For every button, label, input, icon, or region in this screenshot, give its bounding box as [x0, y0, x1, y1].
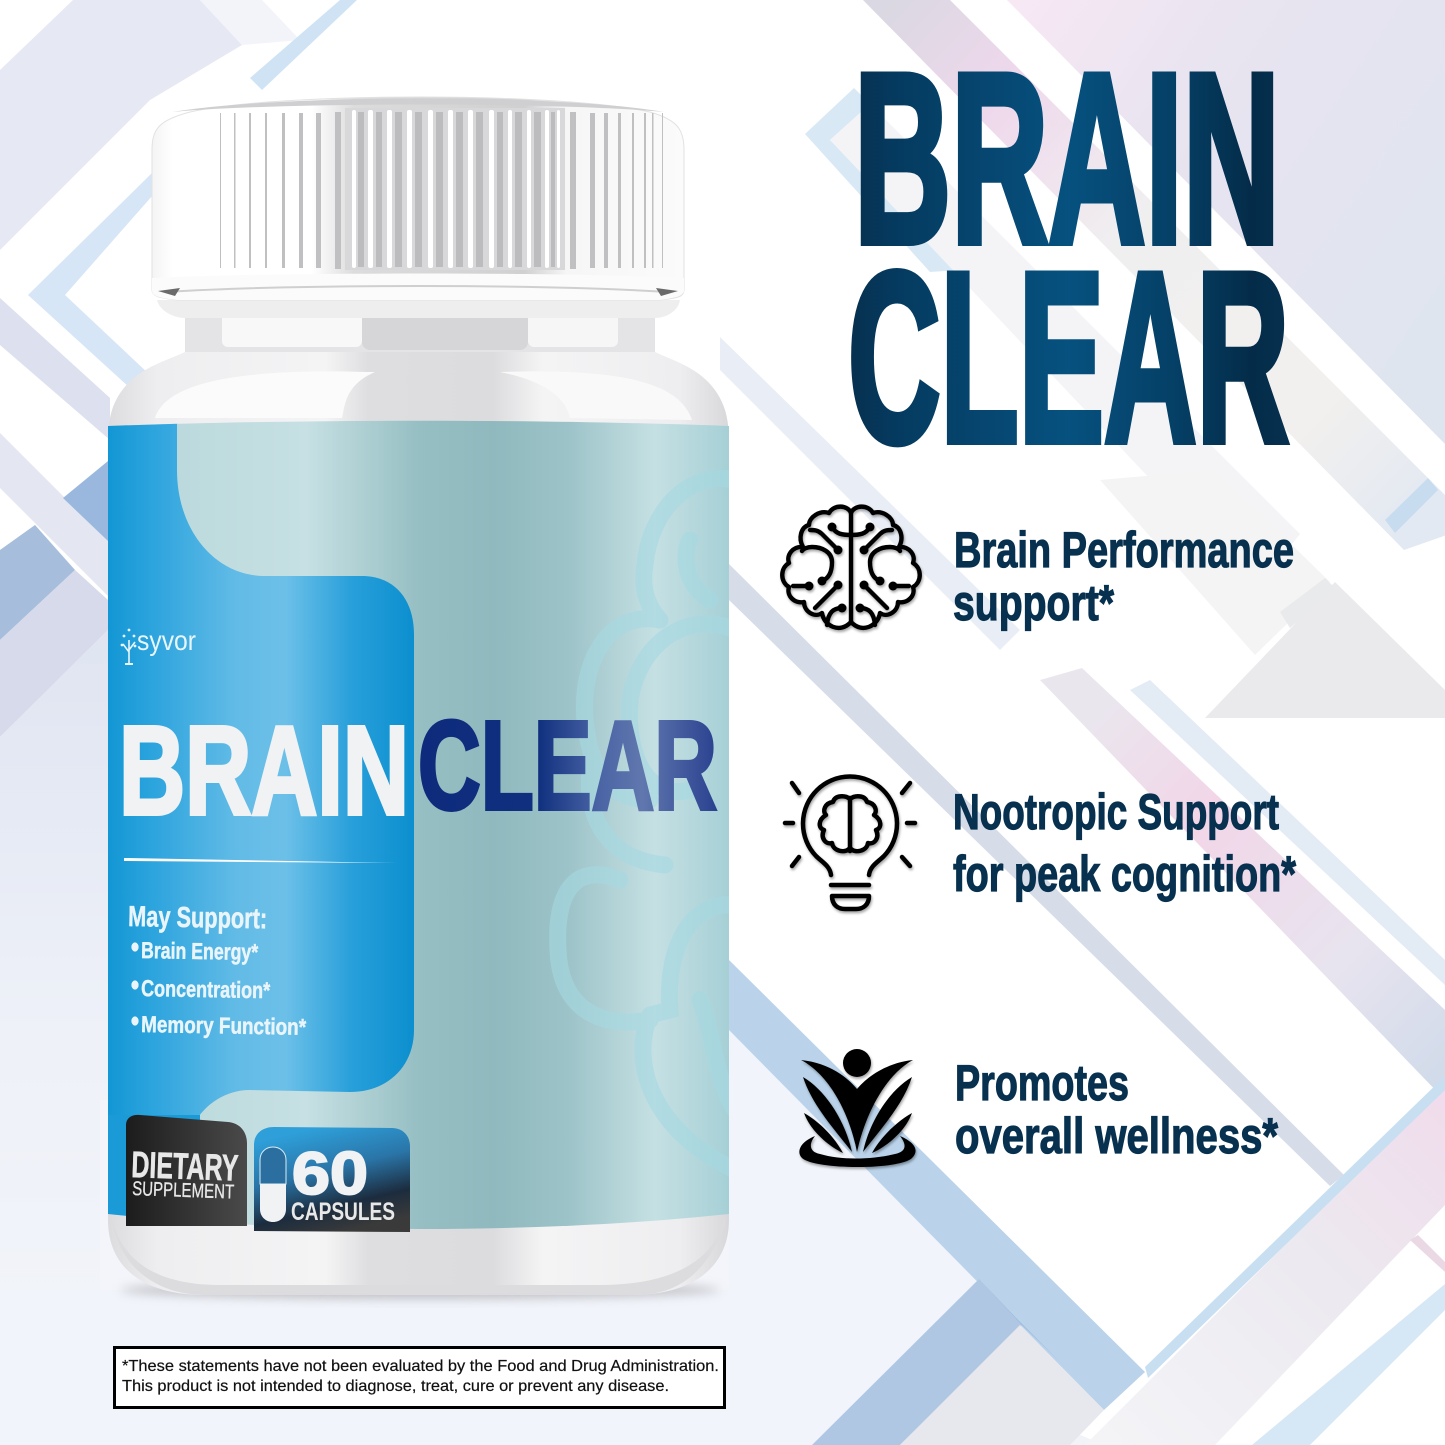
label blue panel	[108, 424, 414, 1115]
label benefits list	[128, 901, 306, 1040]
logo: syvor	[121, 625, 196, 665]
benefit 2: nootropic support	[785, 777, 1296, 909]
label brand name: BRAIN: BRAIN	[119, 700, 409, 841]
label brand name: CLEAR: CLEAR	[418, 695, 717, 836]
benefit text: Brain Performance	[954, 522, 1294, 578]
label divider	[124, 858, 398, 863]
benefit text	[955, 1055, 1278, 1164]
benefit 3: overall wellness	[799, 1049, 1278, 1167]
label benefits list: Memory Function*	[141, 1011, 306, 1040]
benefit text: Nootropic Support	[953, 784, 1279, 840]
label background	[100, 415, 735, 1245]
label benefits list: Concentration*	[141, 975, 270, 1003]
disclaimer box: *These statements have not been evaluated by the Food and Drug Administration.	[122, 1358, 719, 1375]
bottle neck	[185, 310, 655, 375]
benefit text	[953, 784, 1296, 902]
bottle cap	[152, 97, 684, 318]
benefit text	[953, 522, 1294, 631]
bottle body	[108, 352, 729, 1295]
icon: tree	[121, 629, 136, 665]
disclaimer box: This product is not intended to diagnose, treat, cure or prevent any disease.	[122, 1378, 669, 1395]
badge: dietary supplement: DIETARY	[131, 1144, 239, 1189]
label benefits list: Brain Energy*	[141, 937, 258, 965]
badge: 60 capsules	[254, 1127, 410, 1232]
product bottle	[100, 97, 735, 1299]
label watermark brain	[549, 475, 697, 1157]
badge: dietary supplement	[126, 1115, 247, 1226]
icon: capsule	[260, 1147, 286, 1222]
bottle shadow	[120, 1281, 720, 1299]
benefit text: for peak cognition*	[953, 846, 1296, 902]
disclaimer box	[114, 1348, 724, 1408]
icon: wellness figure	[799, 1049, 916, 1167]
title	[848, 24, 1289, 493]
badge: 60 capsules: 60	[292, 1140, 368, 1207]
icon: circuit brain	[782, 507, 920, 628]
benefit text: Promotes	[955, 1055, 1129, 1111]
cap ribs	[220, 112, 663, 269]
benefit text: support*	[953, 575, 1114, 631]
logo: syvor: syvor	[137, 625, 196, 656]
icon: light bulb with brain	[785, 777, 915, 909]
badge: 60 capsules: CAPSULES	[291, 1198, 395, 1226]
label benefits list: May Support:	[128, 901, 267, 935]
badge: dietary supplement: SUPPLEMENT	[132, 1178, 235, 1204]
benefit text: overall wellness*	[955, 1108, 1278, 1164]
benefit 1: brain performance	[782, 507, 1294, 631]
